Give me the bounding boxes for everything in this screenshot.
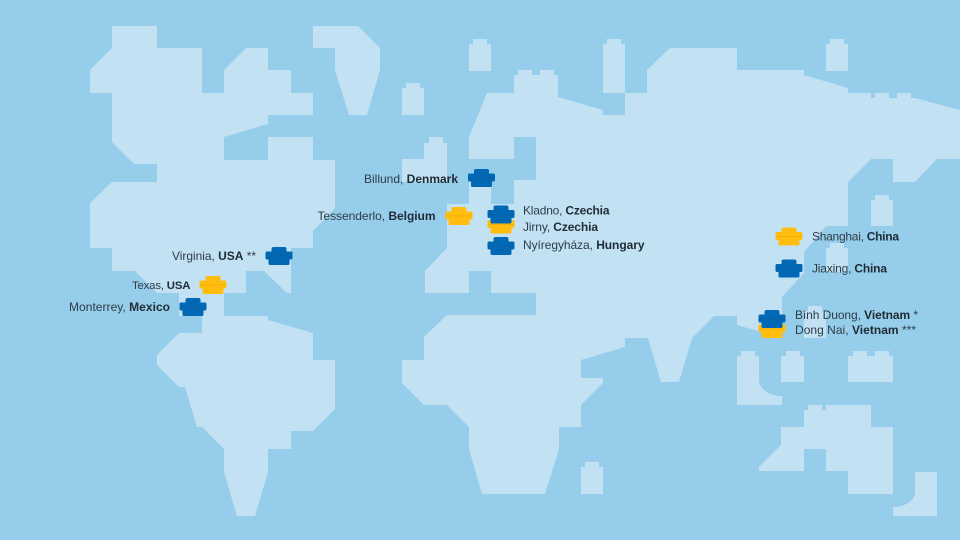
site: Kladno, Czechia	[488, 204, 610, 224]
island: Madagascar	[581, 462, 603, 494]
continent: the Americas	[90, 26, 335, 516]
site: Jirny, Czechia: Jirny, Czechia	[523, 220, 598, 234]
island: Greenland	[313, 26, 380, 115]
site: Nyíregyháza, Hungary: Nyíregyháza, Hungary	[523, 238, 645, 252]
site: Texas, USA	[132, 276, 226, 294]
island: Novaya Zemlya	[603, 39, 625, 93]
site: Bình Duong, Vietnam	[758, 308, 918, 328]
site: Monterrey, Mexico: Monterrey, Mexico	[69, 300, 170, 314]
continent: Eurasia and Africa	[402, 48, 960, 494]
site: Dong Nai, Vietnam	[758, 320, 916, 338]
island: British Isles	[402, 137, 447, 182]
site: Texas, USA: Texas, USA	[132, 280, 190, 292]
site: Virginia, USA: Virginia, USA **	[172, 249, 256, 263]
site: Nyíregyháza, Hungary	[488, 237, 645, 255]
island: Borneo	[781, 351, 804, 382]
site: Dong Nai, Vietnam: Dong Nai, Vietnam ***	[795, 323, 916, 337]
site: Kladno, Czechia: Kladno, Czechia	[523, 204, 610, 218]
site: Shanghai, China	[776, 228, 899, 246]
island: northern Europe	[469, 39, 491, 71]
island: Iceland	[402, 83, 424, 115]
island: New Guinea	[848, 351, 893, 382]
site: Jirny, Czechia	[488, 216, 598, 234]
site: Billund, Denmark: Billund, Denmark	[364, 172, 458, 186]
site: Tessenderlo, Belgium: Tessenderlo, Belgium	[318, 209, 436, 223]
site: Bình Duong, Vietnam: Bình Duong, Vietnam *	[795, 308, 918, 322]
island: Japan	[871, 195, 893, 226]
island: Arctic	[826, 39, 848, 71]
island: Sumatra	[737, 351, 782, 405]
site: Jiaxing, China	[776, 260, 887, 278]
site: Shanghai, China: Shanghai, China	[812, 230, 899, 244]
island: Taiwan	[826, 243, 848, 272]
site: Jiaxing, China: Jiaxing, China	[812, 262, 887, 276]
site: Tessenderlo, Belgium	[318, 207, 472, 225]
site: Monterrey, Mexico	[69, 298, 206, 316]
site: Virginia, USA	[172, 247, 292, 265]
island: New Zealand	[893, 472, 937, 516]
continent: Australia	[759, 405, 893, 494]
island: Philippines	[804, 306, 826, 338]
site: Billund, Denmark	[364, 169, 495, 187]
